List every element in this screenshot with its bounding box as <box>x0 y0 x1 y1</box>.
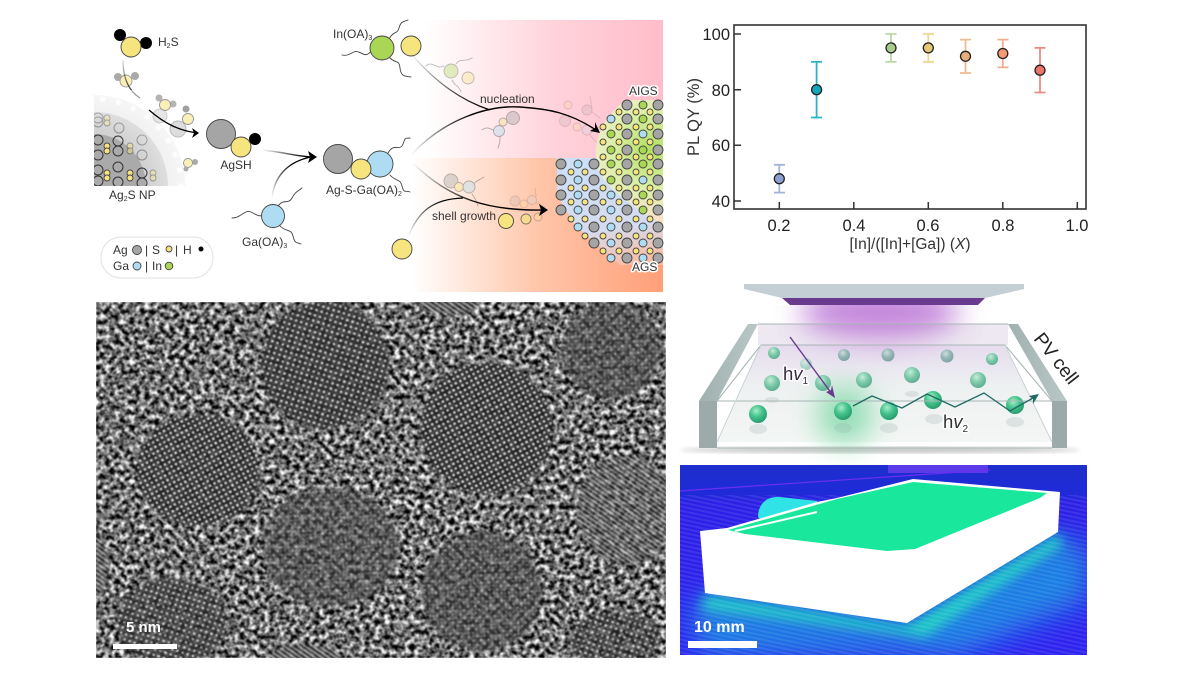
data point X=0.6 <box>923 34 934 62</box>
x tick labels: 0.8 <box>992 217 1014 235</box>
molecule: Ag-S-Ga(OA)2 <box>324 138 410 198</box>
sphere reflections <box>749 391 1024 434</box>
data point X=0.3 <box>811 62 822 118</box>
legend: In <box>152 259 162 273</box>
chart: PL QY vs In fraction <box>685 25 1088 253</box>
UV lamp glow <box>800 286 960 338</box>
label: PV cell: PV cell <box>1029 329 1082 389</box>
label: AGS: AGS <box>632 260 657 274</box>
arrow: nanoparticle to AgSH <box>149 110 199 138</box>
panel: photograph of glowing concentrator <box>680 465 1087 655</box>
molecule: AgSH: AgSH <box>220 158 252 172</box>
y tick labels: 100 <box>702 26 730 44</box>
legend: | <box>145 243 148 257</box>
x tick labels: 0.6 <box>917 217 939 235</box>
legend: Ga <box>113 259 129 273</box>
concentrator floor <box>717 345 1052 442</box>
cyan cylinder <box>758 497 817 519</box>
legend: Ag <box>113 243 128 257</box>
molecule: H2S: 2 <box>167 43 171 50</box>
molecule: In(OA)3 and S: 3 <box>368 35 372 42</box>
arrow: H2S to nanoparticle <box>123 60 140 98</box>
S atoms on shell growth path <box>498 213 542 228</box>
legend: H <box>183 243 192 257</box>
molecule: free S precursor <box>392 239 412 259</box>
faded intermediates near nucleation product <box>482 112 520 148</box>
glowing box body <box>700 479 1060 623</box>
panel: luminescent solar concentrator diagram <box>680 284 1082 453</box>
faded intermediates along nucleation path <box>426 58 474 92</box>
green emission glow <box>817 385 873 445</box>
floor texture <box>680 495 1087 655</box>
molecule: Ag-S-Ga(OA)2: Ag-S-Ga(OA) <box>326 183 398 197</box>
data point X=0.5 <box>886 34 896 62</box>
nucleation gradient background <box>425 20 663 158</box>
molecule: In(OA)3 and S <box>333 20 421 77</box>
nanocrystal lattice fringes <box>96 302 666 658</box>
UV lamp emitter <box>782 298 985 305</box>
base shadow <box>680 447 1080 453</box>
legend <box>101 237 213 278</box>
data point X=0.7 <box>960 40 971 73</box>
faded H2S approaching the nanoparticle <box>114 72 139 87</box>
scale bar: 10 mm <box>688 619 757 648</box>
label: incident photon energy: 1 <box>803 376 809 387</box>
arrow: shell growth <box>413 163 548 216</box>
arrows: AgSH and Ga(OA)3 merging <box>262 150 317 198</box>
molecule: Ga(OA)3: Ga(OA) <box>242 235 283 249</box>
arrow: incident photon <box>790 337 835 398</box>
plot frame <box>734 25 1086 209</box>
front row spheres <box>749 391 1024 423</box>
label: emitted photon energy: hv <box>943 411 963 432</box>
faded reaction intermediates on the surface <box>153 94 198 172</box>
x tick labels: 0.2 <box>768 217 790 235</box>
scale bar: 5 nm <box>113 619 177 649</box>
arrow: free S joins shell growth <box>408 198 463 237</box>
data point X=0.8 <box>998 40 1008 67</box>
shell growth gradient background <box>412 158 663 292</box>
middle row spheres <box>764 367 986 391</box>
molecule: H2S: H <box>158 35 167 49</box>
y tick labels: 60 <box>712 137 730 155</box>
back wall purple patch <box>888 465 988 473</box>
panel: reaction schematic <box>94 20 664 292</box>
molecule: Ga(OA)3 <box>232 188 302 250</box>
white strip on top surface <box>735 512 817 531</box>
arrow: nucleation <box>411 107 600 155</box>
very faded intermediates before AIGS <box>560 96 600 142</box>
y tick labels: 80 <box>712 82 730 100</box>
nanocrystal: AIGS core and AGS shell lattice <box>556 100 663 265</box>
back row spheres <box>768 347 998 370</box>
molecule: AgSH <box>206 120 261 172</box>
legend: | <box>175 243 178 257</box>
molecule: Ga(OA)3: 3 <box>283 243 287 250</box>
molecule: Ag-S-Ga(OA)2: 2 <box>398 191 402 198</box>
axis ticks <box>734 34 1077 209</box>
legend: S <box>152 243 160 257</box>
TEM noise background <box>96 302 666 658</box>
back glass wall <box>758 324 1008 345</box>
very faded shell growth intermediates <box>510 188 545 208</box>
scale bar: 10 mm: 10 mm <box>694 619 745 636</box>
panel: TEM micrograph <box>96 302 666 658</box>
UV lamp plate <box>744 284 1024 298</box>
arrow: In precursor branch <box>412 55 490 110</box>
bright floor glow along box edge <box>700 532 1064 638</box>
label: Ag2S NP: 2 <box>124 196 128 203</box>
label: Ag2S NP: S NP <box>128 188 156 202</box>
molecule: H2S: S <box>171 35 179 49</box>
label: Ag2S NP: Ag <box>109 188 124 202</box>
label: AIGS: AIGS <box>629 84 658 98</box>
data point X=0.9 <box>1034 48 1046 92</box>
y tick labels: 40 <box>712 193 730 211</box>
molecule: H2S <box>114 29 179 57</box>
molecule: In(OA)3 and S: In(OA) <box>333 27 368 41</box>
photo background <box>680 465 1087 655</box>
faded intermediates along shell growth path <box>444 174 484 206</box>
arrow: waveguided emission <box>853 393 1039 411</box>
y tick labels <box>702 26 730 211</box>
x tick labels: 0.4 <box>843 217 865 235</box>
legend: | <box>145 259 148 273</box>
y axis title: PL QY (%) <box>685 78 703 156</box>
x tick labels <box>768 217 1088 235</box>
horizon line <box>680 470 990 491</box>
label: nucleation: nucleation <box>480 92 535 106</box>
x tick labels: 1.0 <box>1066 217 1088 235</box>
label: shell growth: shell growth <box>432 209 496 223</box>
scale bar: 5 nm: 5 nm <box>126 619 161 636</box>
label: emitted photon energy: 2 <box>963 424 969 435</box>
data point X=0.2 <box>774 165 785 193</box>
floor glow <box>690 535 1087 655</box>
x axis title: [In]/([In]+[Ga]) (X) <box>849 236 971 253</box>
label: incident photon energy: hv <box>783 363 803 384</box>
Ag2S nanoparticle <box>94 90 185 186</box>
green top surface <box>728 482 1047 551</box>
frame bars and PV cell edges <box>699 324 1067 448</box>
